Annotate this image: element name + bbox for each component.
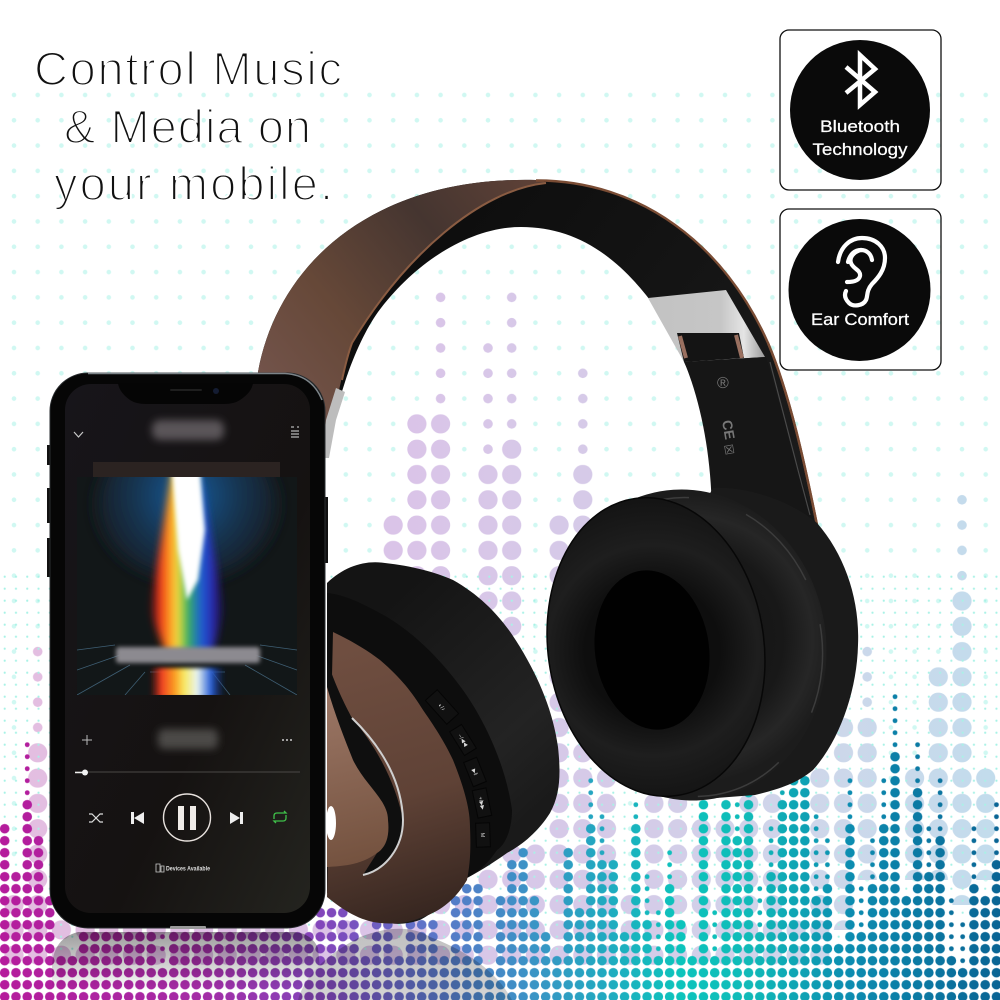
arm: highlight stripe	[770, 362, 810, 515]
left ear cup: dark inner cut	[327, 660, 403, 875]
left ear cup: inner black ring	[327, 593, 512, 890]
control buttons: −/◀◀	[456, 733, 469, 748]
regulatory marks: CE	[719, 419, 738, 441]
blurred artist name	[158, 729, 218, 749]
icon: pause button	[164, 794, 210, 841]
headband: silver strip by phone	[322, 388, 345, 458]
badge: Bluetooth Technology	[780, 30, 941, 190]
left ear cup: gap in yoke	[326, 806, 336, 840]
badge label	[812, 117, 908, 159]
icon: shuffle	[89, 814, 103, 822]
badge label: Technology	[812, 140, 908, 159]
regulatory marks	[717, 375, 738, 456]
badge label: Bluetooth	[820, 117, 900, 136]
headband: copper rim highlight	[342, 183, 546, 380]
title: & Media on	[64, 100, 311, 153]
left ear cup: inner brown yoke	[327, 687, 388, 867]
icon: next	[230, 812, 243, 824]
slider: brown clips	[680, 335, 742, 358]
right ear cup: shell	[650, 488, 858, 800]
phone: top bezel highlight	[88, 374, 322, 400]
control buttons	[425, 690, 492, 847]
album banner	[93, 462, 280, 477]
control buttons: ▶‖	[470, 768, 478, 777]
title: your mobile.	[54, 157, 333, 210]
left ear cup: silver crescent	[352, 718, 403, 875]
right ear cup: back stitch	[534, 476, 846, 818]
icon: add	[82, 735, 92, 745]
equaliser: foreground gradient dot columns	[0, 694, 1000, 1000]
phone: home connector glimpse	[170, 926, 206, 929]
headphones	[258, 180, 858, 924]
headband: lower black arm	[684, 357, 817, 530]
icon: queue	[291, 427, 299, 437]
headband: brown outer shell	[258, 180, 546, 470]
icon: repeat	[274, 811, 286, 823]
icon: bluetooth	[846, 55, 875, 105]
control buttons: ◐/♪	[436, 703, 446, 713]
slider: silver	[648, 290, 765, 362]
icon: chevron	[74, 432, 83, 437]
regulatory marks: ®	[717, 375, 729, 392]
phone: body	[50, 373, 325, 928]
blurred song title	[152, 420, 224, 440]
progress bar	[75, 770, 300, 776]
album artwork	[77, 477, 297, 695]
control buttons: +/▶▶	[477, 796, 485, 811]
equaliser: lavender dot columns	[4, 292, 996, 965]
phone: screen	[65, 384, 310, 913]
headband: thin brown outer edge	[536, 180, 817, 525]
icon: ear	[838, 238, 885, 305]
badge label: Ear Comfort	[811, 310, 909, 329]
headband: black underside	[258, 180, 817, 530]
background: fine cyan dot grid	[0, 572, 1000, 1000]
title	[34, 42, 342, 210]
icon: more dots	[282, 739, 292, 741]
left ear cup: brown plate	[327, 632, 470, 923]
phone: speaker and camera	[170, 388, 219, 394]
devices available	[156, 864, 210, 872]
icon: previous	[131, 812, 144, 824]
phone: side buttons	[47, 445, 328, 577]
regulatory marks: ☒	[721, 443, 737, 456]
phone: notch	[118, 383, 253, 404]
left ear cup: cushion	[327, 562, 559, 924]
arm: brown edge	[768, 343, 817, 525]
right ear cup: cushion back	[523, 467, 851, 823]
badge: Ear Comfort	[780, 209, 941, 370]
slider: dark window	[677, 333, 744, 362]
title: Control Music	[34, 42, 342, 95]
control buttons: M	[479, 833, 485, 838]
background: sparse cyan dot grid	[0, 82, 1000, 882]
devices available: Devices Available	[166, 866, 210, 872]
smartphone	[47, 373, 328, 929]
right ear cup: cushion front	[528, 483, 784, 811]
floor reflections of phone and ear cup	[52, 929, 512, 1000]
right ear cup: opening	[584, 563, 720, 737]
